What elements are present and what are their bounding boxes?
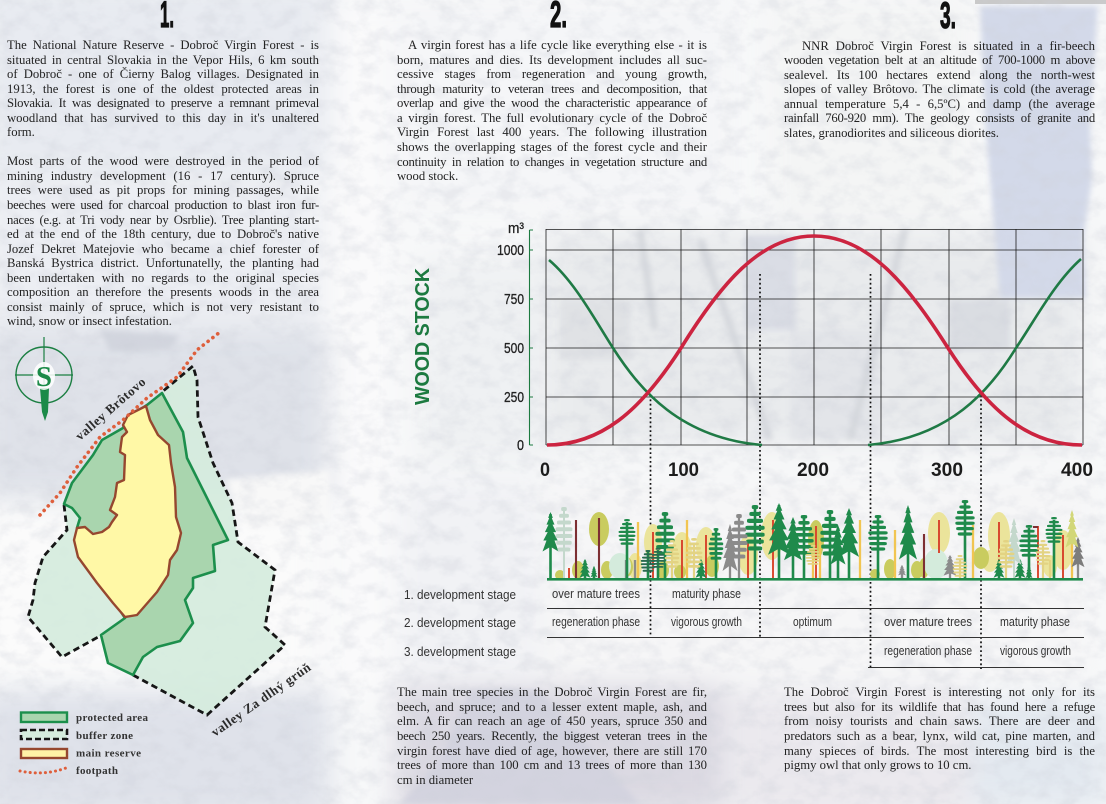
y axis: 0 — [517, 437, 524, 454]
x axis labels: 0 — [540, 460, 550, 481]
text block: forest life cycle: Virgin Forest last 400 years. The following illustration — [397, 125, 707, 139]
legend: footpath — [76, 765, 118, 777]
text block: history of the reserve: consist mainly of spruce, which is not very resistant to — [7, 300, 319, 314]
text block: main tree species: The main tree species in the Dobroč Virgin Forest are fir, — [397, 685, 707, 699]
text block: history of the reserve: Jozef Dekret Matejovie who became a chief forester of — [7, 242, 319, 256]
text block: history of the reserve: situated in central Slovakia in the Vepor Hils, 6 km south — [7, 53, 319, 67]
legend: main reserve — [76, 748, 141, 760]
text block: forest life cycle: continuity in relation to changes in vegetation structure and — [397, 155, 707, 169]
red curve: optimum — [547, 236, 1082, 445]
text block: site description: slopes of valley Brôtovo. The climate is cold (the average — [784, 82, 1095, 96]
icon: compass with letter S: S — [36, 361, 52, 393]
text block: forest life cycle — [397, 38, 708, 183]
text block: forest life cycle: wood stock. — [397, 169, 458, 183]
text block: site description: NNR Dobroč Virgin Forest is situated in a fir-beech — [802, 39, 1095, 53]
x axis labels: 200 — [797, 460, 829, 481]
stage row labels: 2. development stage — [404, 615, 516, 630]
text block: wildlife: The Dobroč Virgin Forest is interesting not only for its — [784, 685, 1095, 699]
spruce and fir crowns — [542, 500, 1084, 578]
stage phase cells: over mature trees — [552, 586, 640, 601]
text block: main tree species: cm in diameter — [397, 773, 473, 787]
x axis labels: 100 — [668, 460, 699, 481]
text block: site description — [784, 39, 1096, 140]
text block: history of the reserve: trees were used as pit props for mining passages, while — [7, 183, 319, 197]
legend — [20, 712, 148, 777]
legend: protected area — [76, 712, 148, 724]
legend: buffer zone — [76, 730, 133, 742]
text block: site description: rainfall 760-920 mm). The geology consists of granite and — [784, 111, 1095, 125]
text block: history of the reserve: 1913, the forest is one of the oldest protected areas in — [7, 82, 319, 96]
stage phase cells: vigorous growth — [671, 614, 742, 629]
y axis: m³ — [508, 220, 524, 237]
buffer zone — [28, 366, 285, 715]
label: valley Brôtovo: valley Brôtovo — [72, 374, 148, 443]
x axis labels — [540, 460, 1093, 481]
dotted stage dividers — [650, 274, 981, 669]
text block: main tree species: beech 250 years. Recently, the biggest veteran trees in the — [397, 729, 707, 743]
footpath — [40, 332, 220, 515]
x axis labels: 300 — [931, 460, 963, 481]
text block: history of the reserve: composition an therefore the presents woods in the area — [7, 285, 319, 299]
text block: forest life cycle: through maturity to veteran trees and decomposition, that — [397, 82, 707, 96]
text block: history of the reserve: mining industry development (16 - 17 century). Spruce — [7, 169, 319, 183]
stage phase cells — [552, 586, 1071, 658]
text block: forest life cycle: overlap and give the wood the characteristic appearance of — [397, 96, 707, 110]
text block: history of the reserve: ed at the end of the 18th century, due to Dobroč's native — [7, 227, 319, 241]
stage phase cells: regeneration phase — [552, 614, 640, 629]
ground line — [547, 578, 1083, 581]
green curve: decline and regrowth — [549, 259, 1081, 445]
text block: wildlife: pigmy owl that only grows to 10 cm. — [784, 758, 971, 772]
protected area — [64, 393, 228, 675]
text block: history of the reserve: Slovakia. It was designated to preserve a remnant primeval — [7, 96, 319, 110]
stage phase cells: optimum — [793, 614, 832, 629]
text block: forest life cycle: shows the overlapping stages of the forest cycle and their — [397, 140, 707, 154]
text block: history of the reserve: beeches were used for charcoal production to blast iron fur- — [7, 198, 319, 212]
text block: main tree species: trees of more than 100 cm and 13 trees of more than 130 — [397, 758, 707, 772]
text block: history of the reserve: form. — [7, 125, 35, 139]
map of the reserve — [15, 332, 314, 777]
text block: history of the reserve: of Dobroč - one of Čierny Balog villages. Designated in — [7, 67, 319, 81]
text block: history of the reserve: wind, snow or insect infestation. — [7, 314, 172, 328]
y axis — [497, 220, 533, 454]
text block: history of the reserve: Banská Bystrica district. Unfortunatelly, the planting had — [7, 256, 319, 270]
label: valley Za dlhý grúň: valley Za dlhý grúň — [208, 659, 314, 739]
stage phase cells: maturity phase — [672, 586, 741, 601]
table rules — [547, 608, 1084, 668]
text block: history of the reserve: naces (e.g. at Tri vody near by Osrblie). Tree planting start- — [7, 213, 319, 227]
main reserve — [74, 406, 181, 617]
y-axis title: WOOD STOCK — [412, 267, 434, 405]
stage row labels: 3. development stage — [404, 644, 516, 659]
y axis: 1000 — [497, 242, 524, 259]
text block: site description: sealevel. Its 100 hectares extend along the north-west — [784, 68, 1095, 82]
text block: forest life cycle: A virgin forest has a life cycle like everything else - it is — [408, 38, 707, 52]
text block: forest life cycle: cessive stages from regeneration and young growth, — [397, 67, 707, 81]
y axis: 750 — [504, 291, 524, 308]
text block: main tree species: beech, and spruce; and to a lesser extent maple, ash, and — [397, 700, 707, 714]
text block: site description: wooden vegetation belt at an altitude of 700-1000 m above — [784, 53, 1095, 67]
beech crowns and bushes — [628, 512, 1073, 579]
text block: history of the reserve — [7, 38, 319, 328]
text block: forest life cycle: born, matures and dies. Its development includes all suc- — [397, 53, 707, 67]
text block: history of the reserve: woodland that has survived to this day in it's unaltered — [7, 111, 319, 125]
text block: main tree species — [397, 685, 707, 787]
text block: wildlife — [784, 685, 1095, 772]
stage row labels — [404, 587, 516, 659]
stage phase cells: regeneration phase — [884, 643, 972, 658]
text block: main tree species: virgin forest have died of age, however, there are still 170 — [397, 744, 707, 758]
text block: site description: annual temperature 5,4 - 6,5ºC) and damp (the average — [784, 97, 1095, 111]
text block: wildlife: predators such as a bear, lynx, wild cat, pine marten, and — [784, 729, 1095, 743]
y axis: 500 — [504, 340, 524, 357]
text block: history of the reserve: been undertaken with no regards to the original species — [7, 271, 319, 285]
stage phase cells: over mature trees — [884, 614, 972, 629]
stage phase cells: maturity phase — [1000, 614, 1070, 629]
text block: history of the reserve: The National Nature Reserve - Dobroč Virgin Forest - is — [7, 38, 319, 52]
x axis labels: 400 — [1061, 460, 1093, 481]
text block: wildlife: many spieces of birds. The most interesting bird is the — [784, 744, 1095, 758]
text block: forest life cycle: a virgin forest. The full evolutionary cycle of the Dobroč — [397, 111, 707, 125]
icon: compass with letter S — [15, 337, 73, 421]
stage phase cells: vigorous growth — [1000, 643, 1071, 658]
tree trunks — [550, 503, 1078, 579]
text block: main tree species: elm. A fir can reach an age of 450 years, spruce 350 and — [397, 714, 707, 728]
y axis: 250 — [504, 389, 524, 406]
text block: history of the reserve: Most parts of the wood were destroyed in the period of — [7, 154, 319, 168]
text block: wildlife: trees but also for its wildlife that has found here a refuge — [784, 700, 1095, 714]
text block: wildlife: from noisy tourists and chain saws. There are deer and — [784, 714, 1095, 728]
grid — [546, 229, 1083, 445]
stage row labels: 1. development stage — [404, 587, 516, 602]
text block: site description: slates, granodiorites and siliceous diorites. — [784, 126, 999, 140]
